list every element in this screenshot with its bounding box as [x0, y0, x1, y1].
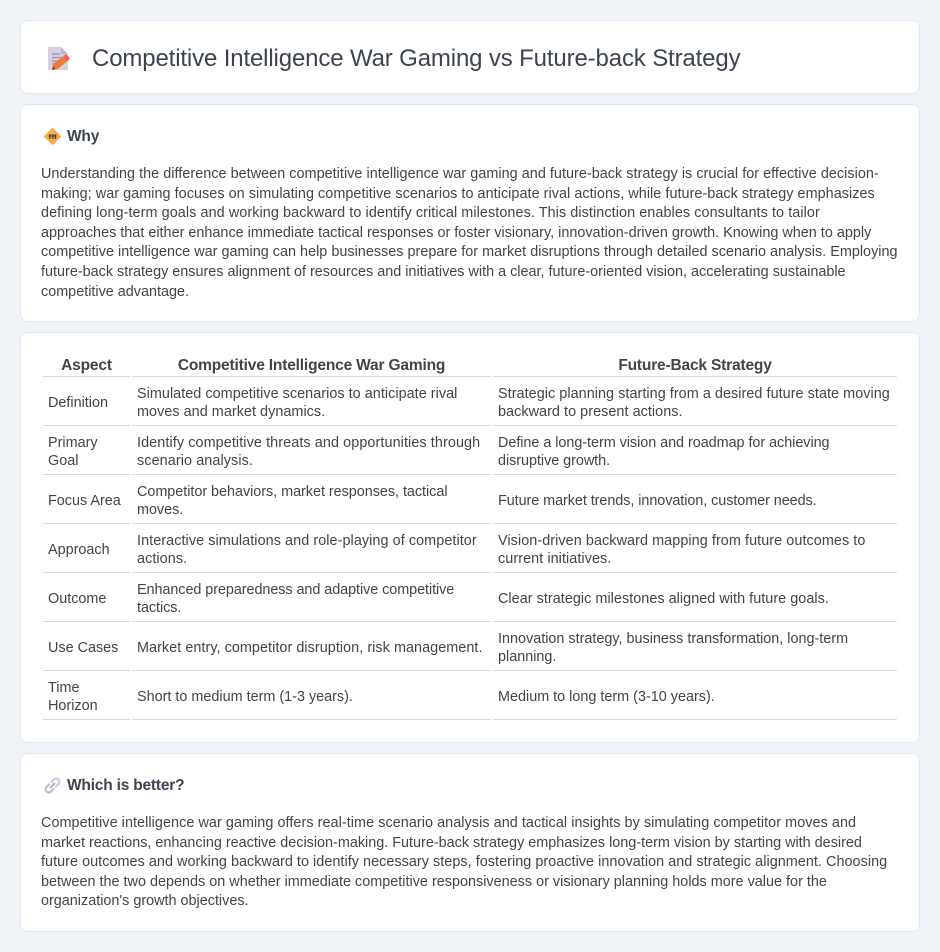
text block: why explanation: competitive advantage. — [41, 284, 189, 300]
table: comparison: Clear strategic milestones aligned with future goals. — [498, 591, 829, 607]
icon: memo with pencil — [48, 47, 70, 70]
table: comparison: moves and market dynamics. — [137, 404, 325, 420]
table: comparison: Define a long-term vision and roadmap for achieving — [498, 435, 830, 451]
text block: which is better explanation: between the two depends on whether immediate competitive responsiveness or visionary planning holds more value for the — [41, 874, 827, 890]
table: comparison: Goal — [48, 453, 78, 469]
text block: which is better explanation: market reactions, enhancing reactive decision-making. Future-back strategy emphasizes long-term vision by starting with desired — [41, 835, 862, 851]
table: comparison: Interactive simulations and role-playing of competitor — [137, 533, 477, 549]
table: comparison: Innovation strategy, business transformation, long-term — [498, 631, 848, 647]
table: comparison: disruptive growth. — [498, 453, 610, 469]
table: comparison: current initiatives. — [498, 551, 611, 567]
text block: which is better explanation — [41, 815, 887, 909]
text block: why explanation: competitive intelligence war gaming can help businesses prepare for market disruptions through detailed scenario analysis. Employing — [41, 244, 898, 260]
table: comparison: Future market trends, innovation, customer needs. — [498, 493, 817, 509]
text block: which is better explanation: organization's growth objectives. — [41, 893, 249, 909]
heading: why: Why — [67, 128, 99, 145]
text block: why explanation: approaches that either enhance immediate tactical responses or foster visionary, innovation-driven growth. Knowing when to apply — [41, 225, 871, 241]
table: comparison: Simulated competitive scenarios to anticipate rival — [137, 386, 457, 402]
table: comparison: Short to medium term (1-3 years). — [137, 689, 353, 705]
table: comparison: Use Cases — [48, 640, 118, 656]
table: comparison: Identify competitive threats and opportunities through — [137, 435, 480, 451]
text block: which is better explanation: future outcomes and working backward to identify necessary steps, fostering proactive innovation and strategic alignment. Choosing — [41, 854, 887, 870]
table: comparison: planning. — [498, 649, 556, 665]
icon: chain link — [44, 778, 60, 794]
table: comparison: tactics. — [137, 600, 181, 616]
panel: which is better — [20, 753, 920, 932]
table: comparison: backward to present actions. — [498, 404, 683, 420]
heading: which is better: Which is better? — [67, 777, 184, 794]
panel: why — [20, 104, 920, 322]
text block: which is better explanation: Competitive intelligence war gaming offers real-time scenario analysis and tactical insights by simulating competitor moves and — [41, 815, 856, 831]
table: comparison: Competitive Intelligence War Gaming — [178, 357, 445, 374]
text block: why explanation: future-back strategy ensures alignment of resources and initiatives with a clear, future-oriented vision, accelerating sustainable — [41, 264, 846, 280]
table: comparison: actions. — [137, 551, 187, 567]
table: comparison: Definition — [48, 395, 108, 411]
title: Competitive Intelligence War Gaming vs Future-back Strategy — [92, 45, 740, 72]
table: comparison: Medium to long term (3-10 years). — [498, 689, 715, 705]
table: comparison: Future-Back Strategy — [618, 357, 772, 374]
table: comparison: Horizon — [48, 698, 98, 714]
table: comparison: Competitor behaviors, market responses, tactical — [137, 484, 448, 500]
table: comparison: Outcome — [48, 591, 106, 607]
table: comparison: Time — [48, 680, 79, 696]
icon: orange diamond sign — [44, 128, 61, 145]
table: comparison: Primary — [48, 435, 98, 451]
panel: comparison table — [20, 332, 920, 743]
table: comparison: scenario analysis. — [137, 453, 253, 469]
table: comparison: Aspect — [61, 357, 112, 374]
text block: why explanation — [41, 166, 898, 300]
table: comparison: Vision-driven backward mapping from future outcomes to — [498, 533, 865, 549]
table: comparison: Focus Area — [48, 493, 121, 509]
table: comparison: Market entry, competitor disruption, risk management. — [137, 640, 482, 656]
table: comparison: Strategic planning starting from a desired future state moving — [498, 386, 890, 402]
table: comparison: Approach — [48, 542, 110, 558]
text block: why explanation: Understanding the difference between competitive intelligence war gaming and future-back strategy is crucial for effective decision- — [41, 166, 879, 182]
panel: title card — [20, 20, 920, 94]
table: comparison: moves. — [137, 502, 183, 518]
text block: why explanation: defining long-term goals and working backward to identify critical milestones. This distinction enables consultants to tailor — [41, 205, 820, 221]
table: comparison: Enhanced preparedness and adaptive competitive — [137, 582, 454, 598]
text block: why explanation: making; war gaming focuses on simulating competitive scenarios to anticipate rival actions, while future-back strategy emphasizes — [41, 186, 875, 202]
